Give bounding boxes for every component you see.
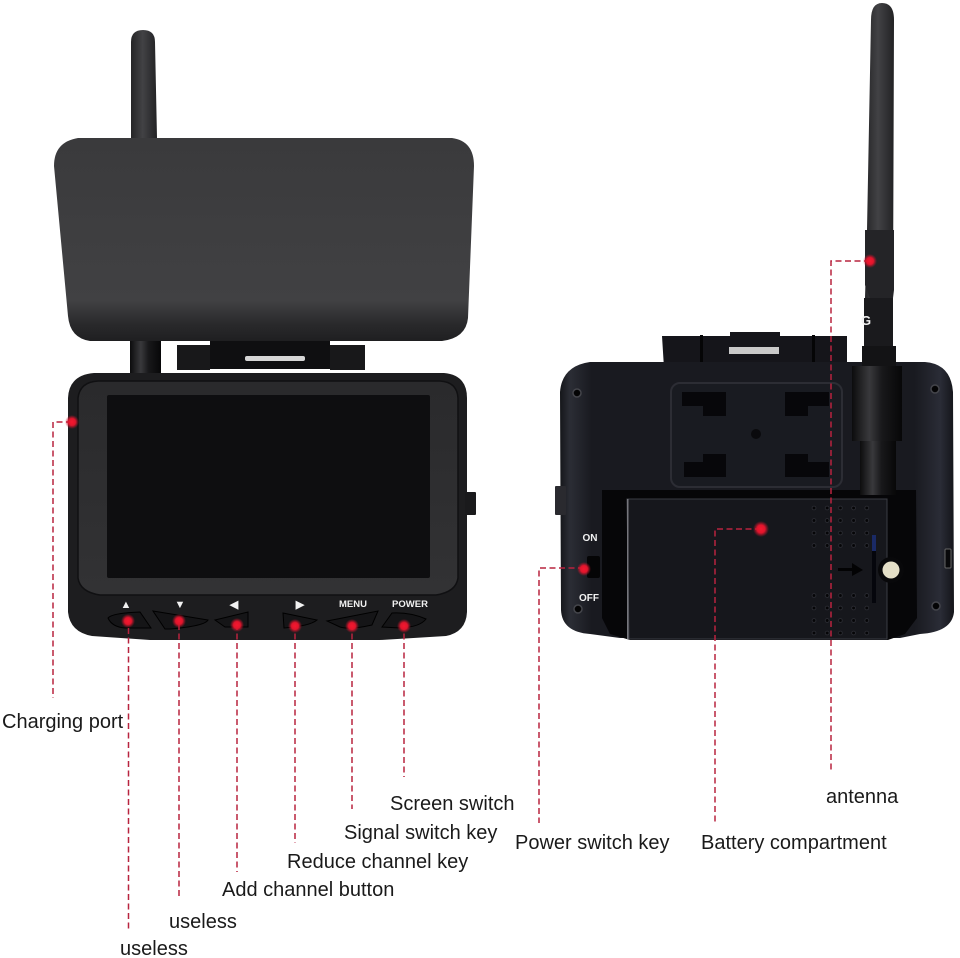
- buttons: [108, 611, 426, 629]
- USB port: [945, 549, 951, 568]
- rear hinge: [662, 332, 847, 368]
- leader line: add channel: [236, 624, 238, 872]
- mounting plate: [671, 383, 842, 487]
- label: power switch key: Power switch key: [515, 832, 670, 854]
- label: battery compartment: Battery compartment: [701, 832, 887, 854]
- front view device: [54, 30, 476, 640]
- button panel labels: ▶: [295, 599, 305, 611]
- leader line: reduce channel: [294, 624, 296, 843]
- side tabs: [555, 486, 566, 515]
- monitor body: [68, 373, 467, 640]
- rear body: [560, 362, 954, 638]
- rear antenna: [852, 3, 902, 495]
- label: useless: useless: [169, 911, 237, 933]
- leader line: charging port: [53, 422, 72, 698]
- leader line: power switch: [539, 568, 584, 823]
- label: signal switch key: Signal switch key: [344, 822, 497, 844]
- leader line: battery: [715, 529, 761, 823]
- button panel labels: ▼: [175, 599, 185, 611]
- red marker dots: [65, 254, 877, 633]
- on off switch: ON: [582, 533, 598, 544]
- button panel labels: ▲: [121, 599, 131, 611]
- screws: [573, 385, 940, 613]
- label: screen switch: Screen switch: [390, 793, 514, 815]
- on off switch: [579, 533, 600, 604]
- label: antenna: antenna: [826, 786, 899, 808]
- side charging port tab: [465, 492, 476, 515]
- icon: arrow: [838, 563, 863, 576]
- on off switch: OFF: [579, 593, 599, 604]
- leader line: signal switch: [351, 624, 353, 809]
- button panel labels: POWER: [392, 599, 428, 610]
- leader line: useless 2: [178, 624, 180, 896]
- leader line: useless 1: [128, 628, 130, 929]
- bezel: [78, 381, 458, 595]
- button panel labels: MENU: [339, 599, 367, 610]
- button panel labels: [121, 599, 428, 611]
- icon: screw: [878, 557, 904, 583]
- label: add channel button: Add channel button: [222, 879, 394, 901]
- leader line: screen switch: [403, 624, 405, 777]
- screen: [107, 395, 430, 578]
- icon: front antenna: [131, 30, 157, 138]
- hinge: [177, 341, 365, 370]
- label: charging port: Charging port: [2, 711, 124, 733]
- leader line: antenna: [831, 261, 870, 770]
- antenna base: [130, 340, 161, 374]
- battery compartment: [602, 490, 917, 640]
- rear view device: [555, 3, 954, 640]
- rear antenna: G: [861, 313, 871, 328]
- label: reduce channel key: Reduce channel key: [287, 851, 468, 873]
- button panel labels: ◀: [229, 599, 239, 611]
- sun shade: [54, 138, 474, 341]
